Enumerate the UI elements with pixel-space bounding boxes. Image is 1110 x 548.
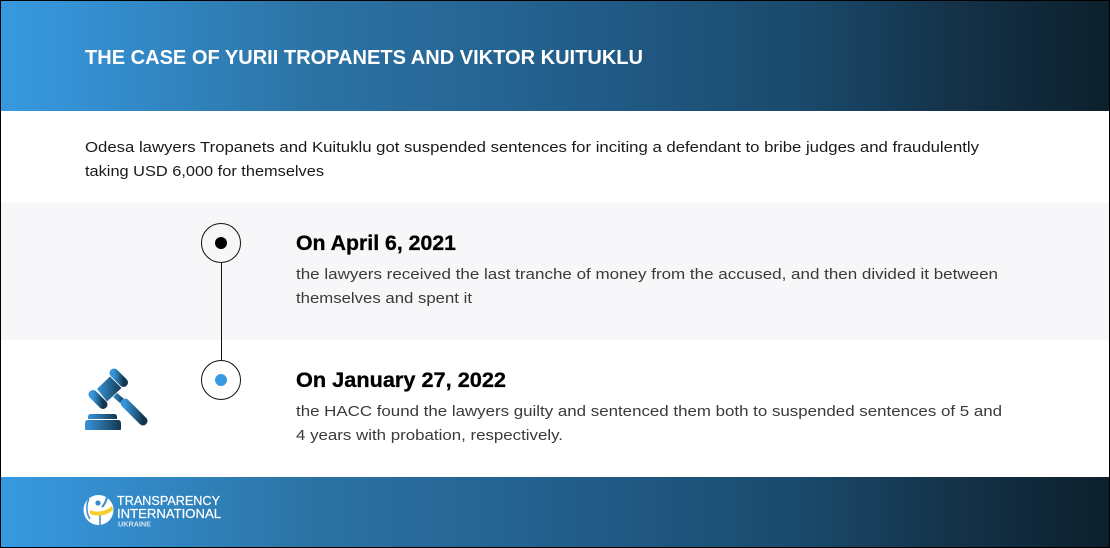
event description: the HACC found the lawyers guilty and sentenced them both to suspended sentences of 5 and bbox=[296, 403, 1002, 420]
timeline bbox=[202, 224, 240, 400]
timeline marker: April 6, 2021 bbox=[202, 224, 240, 262]
event: April 6, 2021 bbox=[296, 232, 998, 307]
event description bbox=[296, 266, 998, 307]
intro text bbox=[85, 139, 980, 180]
logo wordmark bbox=[117, 494, 221, 528]
footer band bbox=[1, 477, 1109, 547]
logo wordmark: UKRAINE bbox=[118, 522, 151, 528]
title: THE CASE OF YURII TROPANETS AND VIKTOR KUITUKLU bbox=[85, 46, 643, 69]
event heading: On April 6, 2021 bbox=[296, 232, 456, 255]
panel: first event background bbox=[1, 203, 1109, 340]
event heading: On January 27, 2022 bbox=[296, 369, 506, 392]
logo: Transparency International Ukraine bbox=[84, 494, 221, 528]
intro text: taking USD 6,000 for themselves bbox=[85, 163, 324, 180]
event description: themselves and spent it bbox=[296, 290, 473, 307]
icon: gavel bbox=[85, 373, 143, 430]
event description: the lawyers received the last tranche of money from the accused, and then divided it between bbox=[296, 266, 998, 283]
event description: 4 years with probation, respectively. bbox=[296, 427, 563, 444]
logo emblem bbox=[84, 495, 114, 525]
event: January 27, 2022 bbox=[296, 369, 1002, 444]
intro text: Odesa lawyers Tropanets and Kuituklu got suspended sentences for inciting a defendant to bribe judges and fraudulently bbox=[85, 139, 980, 156]
timeline marker: January 27, 2022 bbox=[202, 360, 240, 400]
header band bbox=[1, 1, 1109, 111]
event description bbox=[296, 403, 1002, 444]
logo wordmark: TRANSPARENCY bbox=[117, 494, 221, 508]
logo wordmark: INTERNATIONAL bbox=[117, 507, 221, 521]
